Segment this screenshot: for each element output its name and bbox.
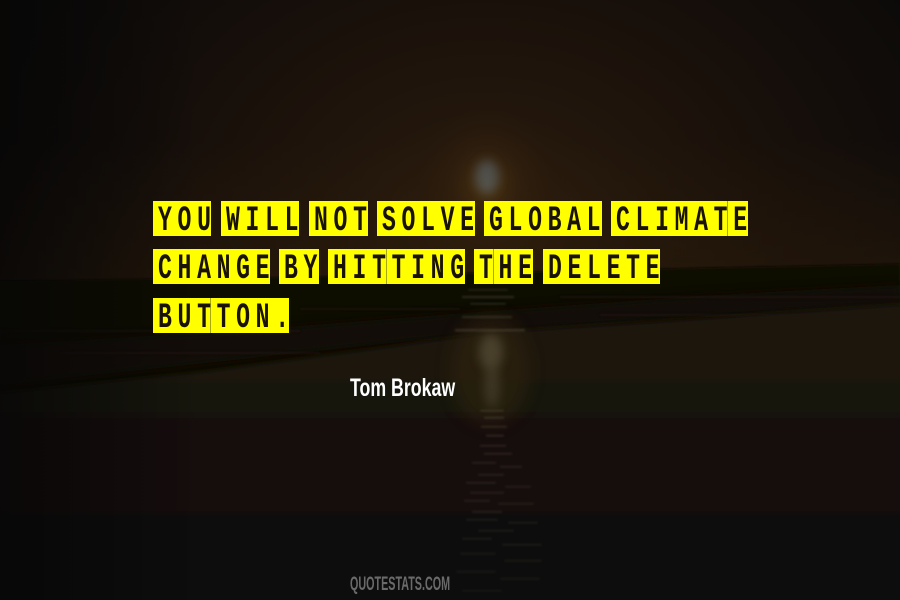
- word: CLIMATE: CLIMATE: [616, 200, 753, 241]
- word: BY: BY: [284, 248, 323, 289]
- word: YOU: YOU: [158, 200, 217, 241]
- word: GLOBAL: GLOBAL: [489, 200, 606, 241]
- word: WILL: WILL: [226, 200, 304, 241]
- background: night sky with sun glow: [0, 0, 900, 300]
- word: NOT: NOT: [314, 200, 373, 241]
- word: CHANGE: CHANGE: [158, 248, 275, 289]
- sun reflection on water: [450, 289, 542, 592]
- word: DELETE: DELETE: [548, 248, 665, 289]
- word: HITTING: HITTING: [333, 248, 470, 289]
- author name: Tom Brokaw: [350, 373, 455, 402]
- word: SOLVE: SOLVE: [382, 200, 480, 241]
- word: BUTTON.: BUTTON.: [158, 297, 295, 338]
- background: wet sand: [0, 303, 900, 600]
- site credit: QUOTESTATS.COM: [350, 573, 450, 595]
- quote text: [153, 200, 753, 338]
- background: dark sea band: [0, 264, 900, 600]
- word: THE: THE: [479, 248, 538, 289]
